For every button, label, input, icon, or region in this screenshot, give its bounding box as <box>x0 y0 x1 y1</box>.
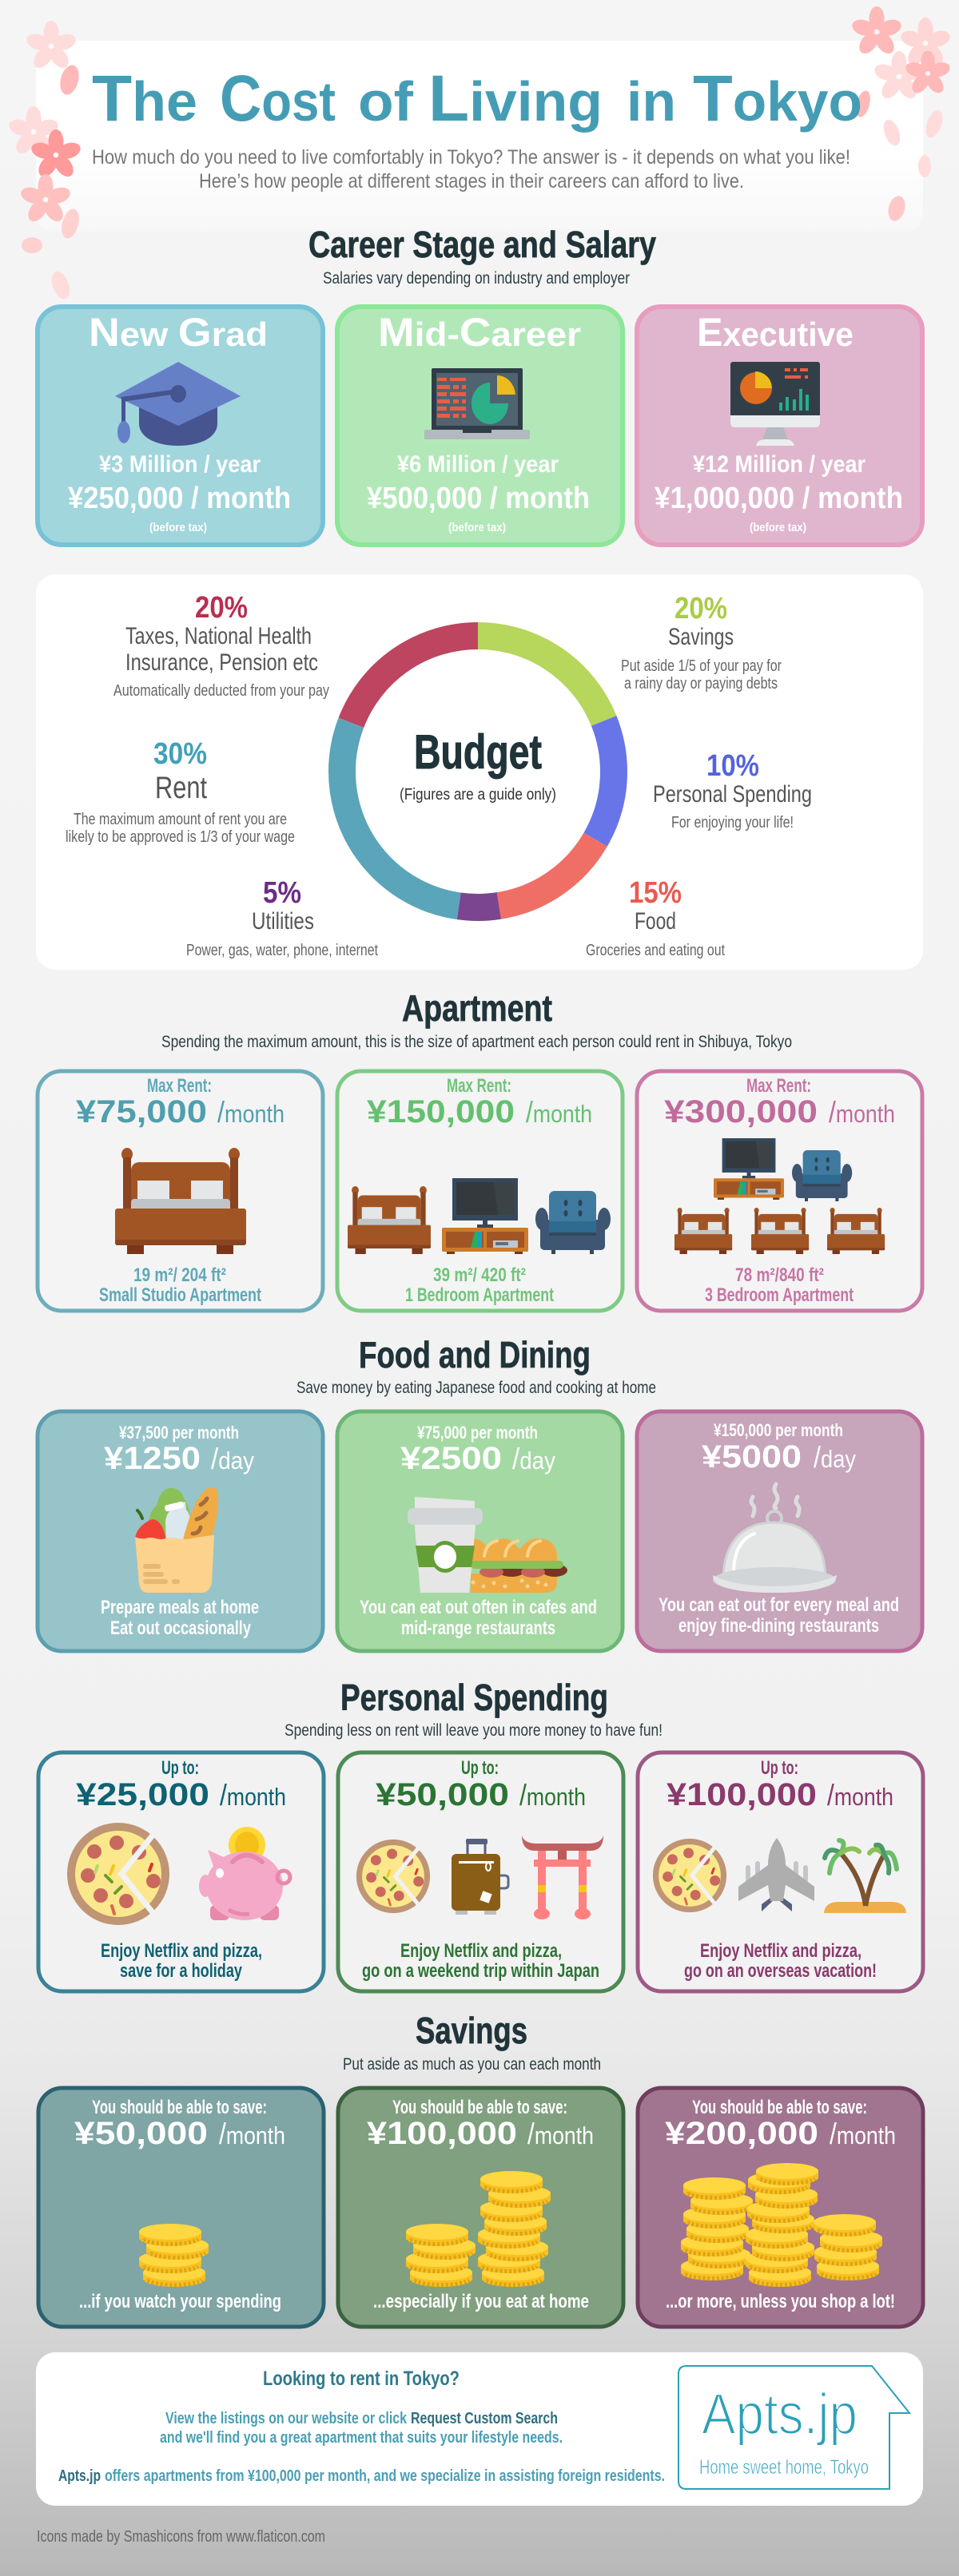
panel: studio apartment: ¥75,000 <box>76 1094 207 1129</box>
cta body text: Apts.jp <box>58 2467 101 2485</box>
panel: budget <box>36 574 923 970</box>
panel: save 200,000 <box>638 2088 923 2327</box>
label: personal spending: For enjoying your life! <box>671 814 794 832</box>
label: savings: Savings <box>668 624 734 650</box>
panel: executive <box>637 307 922 545</box>
panel: save 50,000: ¥50,000 <box>74 2116 208 2151</box>
panel: mid-career: ¥500,000 / month <box>367 482 590 515</box>
panel: save for holiday: /month <box>220 1779 286 1812</box>
label: taxes: Insurance, Pension etc <box>125 649 318 676</box>
panel: studio apartment: /month <box>217 1096 285 1129</box>
panel: overseas vacation <box>638 1752 923 1991</box>
panel: save 100,000: ...especially if you eat at home <box>373 2291 589 2312</box>
panel: weekend trip: /month <box>519 1779 586 1812</box>
icon: suitcase <box>452 1839 508 1915</box>
icon: pizza <box>356 1840 430 1913</box>
panel: fine dining: ¥150,000 per month <box>714 1420 843 1440</box>
title: Cost <box>220 62 336 135</box>
panel: executive: ¥12 Million / year <box>693 451 865 478</box>
panel: cook at home: ¥37,500 per month <box>119 1423 239 1443</box>
panel: new grad: ¥250,000 / month <box>68 482 291 515</box>
panel: save 200,000: ...or more, unless you shop a lot! <box>666 2291 895 2312</box>
subheading: personal spending: Spending less on rent will leave you more money to have fun! <box>285 1721 663 1740</box>
panel: eat out often: You can eat out often in cafes and <box>360 1597 597 1618</box>
label: taxes: Automatically deducted from your pay <box>113 682 329 700</box>
title: The <box>92 62 197 135</box>
logo: Apts.jp house: Home sweet home, Tokyo <box>699 2456 869 2479</box>
panel: one bedroom apartment: 1 Bedroom Apartment <box>405 1284 554 1306</box>
label: rent: The maximum amount of rent you are <box>74 811 287 828</box>
panel: weekend trip <box>338 1752 623 1991</box>
icon: pizza <box>67 1823 169 1925</box>
cta body text <box>58 2410 665 2485</box>
subheading: apartment: Spending the maximum amount, this is the size of apartment each person could rent in Shibuya, Tokyo <box>161 1033 792 1051</box>
panel: three bedroom apartment: 3 Bedroom Apartment <box>705 1284 854 1306</box>
panel: new grad: New Grad <box>89 310 268 355</box>
label: utilities <box>186 876 378 959</box>
logo: Apts.jp house <box>678 2366 909 2489</box>
panel: cook at home: Prepare meals at home <box>101 1597 259 1618</box>
panel: executive: (before tax) <box>750 521 806 534</box>
budget center label: (Figures are a guide only) <box>400 786 556 804</box>
panel: cook at home: Eat out occasionally <box>110 1617 251 1639</box>
footer credit: Icons made by Smashicons from www.flaticon.com <box>37 2528 325 2546</box>
panel: save 50,000: /month <box>219 2118 285 2150</box>
panel: save 200,000: ¥200,000 <box>665 2116 818 2151</box>
panel: save for holiday: save for a holiday <box>120 1960 242 1982</box>
panel: eat out often <box>337 1411 623 1651</box>
panel: studio apartment: Small Studio Apartment <box>99 1284 261 1306</box>
budget center label <box>400 725 556 804</box>
icon: graduation cap <box>115 362 241 446</box>
label: utilities: Power, gas, water, phone, internet <box>186 942 378 959</box>
panel: eat out often: mid-range restaurants <box>401 1617 555 1639</box>
panel: studio apartment: 19 m²/ 204 ft² <box>133 1264 226 1286</box>
label: utilities: Utilities <box>252 908 314 935</box>
icon: serving cloche <box>713 1484 837 1593</box>
title <box>92 62 862 135</box>
label: rent: Rent <box>155 771 207 805</box>
cta body text: offers apartments from ¥100,000 per month, and we specialize in assisting foreign residents. <box>105 2467 665 2485</box>
icon: grocery bag <box>135 1487 218 1593</box>
panel: studio apartment: Max Rent: <box>147 1075 212 1097</box>
label: rent: likely to be approved is 1/3 of your wage <box>66 828 295 846</box>
label: savings <box>621 592 782 693</box>
panel: fine dining <box>637 1411 922 1651</box>
label: rent <box>66 737 295 846</box>
panel: one bedroom apartment: /month <box>526 1096 592 1129</box>
subheading: savings: Put aside as much as you can each month <box>343 2055 601 2074</box>
cta body text: View the listings on our website or click <box>165 2410 408 2427</box>
panel: mid-career: Mid-Career <box>378 310 581 355</box>
header panel <box>36 41 923 232</box>
heading: personal spending: Personal Spending <box>340 1677 608 1718</box>
heading: career stage and salary: Career Stage and Salary <box>308 224 656 265</box>
panel: overseas vacation: Enjoy Netflix and pizza, <box>700 1940 862 1962</box>
label: personal spending: 10% <box>706 749 759 783</box>
icon: palm island <box>824 1840 906 1913</box>
heading: food and dining: Food and Dining <box>359 1334 591 1375</box>
icon: furniture set <box>348 1178 611 1254</box>
panel: fine dining: enjoy fine-dining restaurants <box>678 1615 879 1637</box>
panel: save 100,000: You should be able to save: <box>392 2097 567 2118</box>
icon: piggy bank <box>199 1827 290 1920</box>
icon: airplane <box>738 1838 814 1911</box>
panel: three bedroom apartment <box>637 1071 922 1311</box>
label: taxes: Taxes, National Health <box>125 623 312 649</box>
panel: overseas vacation: go on an overseas vacation! <box>684 1960 877 1982</box>
panel: save for holiday <box>38 1752 324 1991</box>
panel: executive: ¥1,000,000 / month <box>655 482 903 515</box>
panel: one bedroom apartment: ¥150,000 <box>367 1094 515 1129</box>
label: savings: Put aside 1/5 of your pay for <box>621 657 782 675</box>
budget center label: Budget <box>414 725 542 779</box>
heading: savings: Savings <box>416 2010 527 2051</box>
panel: weekend trip: go on a weekend trip within Japan <box>362 1960 599 1982</box>
panel: studio apartment <box>38 1071 323 1311</box>
panel: save 100,000: ¥100,000 <box>367 2116 517 2151</box>
panel: new grad: (before tax) <box>149 521 207 534</box>
label: food <box>586 876 725 959</box>
intro text: How much do you need to live comfortably in Tokyo? The answer is - it depends on what you like! <box>92 146 850 169</box>
title: Tokyo <box>693 62 862 135</box>
panel: cook at home: /day <box>211 1443 254 1475</box>
panel: fine dining: /day <box>814 1441 856 1474</box>
subheading: food: Save money by eating Japanese food and cooking at home <box>296 1379 656 1397</box>
panel: save for holiday: Up to: <box>161 1757 199 1779</box>
panel: new grad <box>38 307 323 545</box>
icon: two coin stacks <box>406 2171 551 2288</box>
panel: save 200,000: You should be able to save: <box>692 2097 867 2118</box>
icon: coin stack <box>139 2224 209 2288</box>
panel: save 200,000: /month <box>830 2118 896 2150</box>
logo: Apts.jp house: Apts.jp <box>702 2383 858 2447</box>
label: personal spending: Personal Spending <box>653 781 812 808</box>
panel: weekend trip: Enjoy Netflix and pizza, <box>400 1940 562 1962</box>
panel: fine dining: ¥5000 <box>702 1439 802 1475</box>
label: savings: 20% <box>674 592 727 625</box>
title: in <box>627 70 676 133</box>
label: taxes: 20% <box>195 591 248 625</box>
label: food: Groceries and eating out <box>586 942 725 959</box>
panel: overseas vacation: ¥100,000 <box>667 1777 817 1812</box>
panel: save 50,000: ...if you watch your spending <box>79 2291 281 2312</box>
subheading: career: Salaries vary depending on industry and employer <box>323 269 630 288</box>
panel: save 50,000 <box>38 2088 324 2327</box>
panel: one bedroom apartment: Max Rent: <box>447 1075 511 1097</box>
panel: eat out often: ¥2500 <box>400 1441 502 1476</box>
panel: three bedroom apartment: 78 m²/840 ft² <box>735 1264 824 1286</box>
icon: bed <box>115 1148 246 1254</box>
panel: weekend trip: Up to: <box>461 1757 499 1779</box>
panel: save for holiday: ¥25,000 <box>76 1777 209 1812</box>
panel: save 100,000: /month <box>527 2118 594 2150</box>
icon: torii gate <box>522 1836 603 1919</box>
panel: save 100,000 <box>338 2088 623 2327</box>
panel: overseas vacation: /month <box>827 1779 893 1812</box>
label: taxes <box>113 591 329 700</box>
icon: furniture set large <box>674 1138 885 1254</box>
panel: three bedroom apartment: /month <box>829 1096 895 1129</box>
title: of <box>358 70 414 133</box>
panel: one bedroom apartment <box>337 1071 623 1311</box>
label: rent: 30% <box>153 737 207 771</box>
panel: call to action <box>36 2352 923 2506</box>
panel: three bedroom apartment: Max Rent: <box>746 1075 811 1097</box>
cta body text: Request Custom Search <box>411 2410 558 2427</box>
panel: eat out often: /day <box>512 1443 555 1475</box>
panel: save for holiday: Enjoy Netflix and pizza, <box>101 1940 262 1962</box>
label: food: Food <box>635 908 676 935</box>
cta body text: and we'll find you a great apartment that suits your lifestyle needs. <box>160 2429 563 2447</box>
label: utilities: 5% <box>263 876 301 910</box>
panel: cook at home <box>38 1411 323 1651</box>
heading: apartment: Apartment <box>402 987 552 1029</box>
label: food: 15% <box>629 876 682 910</box>
intro text: Here’s how people at different stages in their careers can afford to live. <box>199 170 744 193</box>
panel: overseas vacation: Up to: <box>761 1757 798 1779</box>
panel: new grad: ¥3 Million / year <box>99 451 261 478</box>
panel: eat out often: ¥75,000 per month <box>417 1423 538 1443</box>
panel: save 50,000: You should be able to save: <box>92 2097 267 2118</box>
panel: one bedroom apartment: 39 m²/ 420 ft² <box>433 1264 526 1286</box>
icon: coffee and sandwich <box>408 1497 567 1593</box>
panel: mid-career <box>337 307 623 545</box>
panel: mid-career: ¥6 Million / year <box>397 451 559 478</box>
cherry blossoms decoration <box>7 6 952 301</box>
donut chart <box>342 636 614 907</box>
icon: three coin stacks <box>681 2163 882 2288</box>
title: Living <box>428 62 603 135</box>
icon: pizza <box>653 1839 726 1912</box>
panel: three bedroom apartment: ¥300,000 <box>664 1094 818 1129</box>
panel: cook at home: ¥1250 <box>104 1441 201 1476</box>
panel: weekend trip: ¥50,000 <box>376 1777 509 1812</box>
panel: mid-career: (before tax) <box>448 521 506 534</box>
cta heading: Looking to rent in Tokyo? <box>263 2368 460 2390</box>
label: personal spending <box>653 749 812 832</box>
label: savings: a rainy day or paying debts <box>624 675 778 693</box>
panel: executive: Executive <box>697 310 854 355</box>
icon: laptop <box>424 368 530 439</box>
icon: desktop monitor <box>730 362 820 446</box>
intro text <box>92 146 850 193</box>
